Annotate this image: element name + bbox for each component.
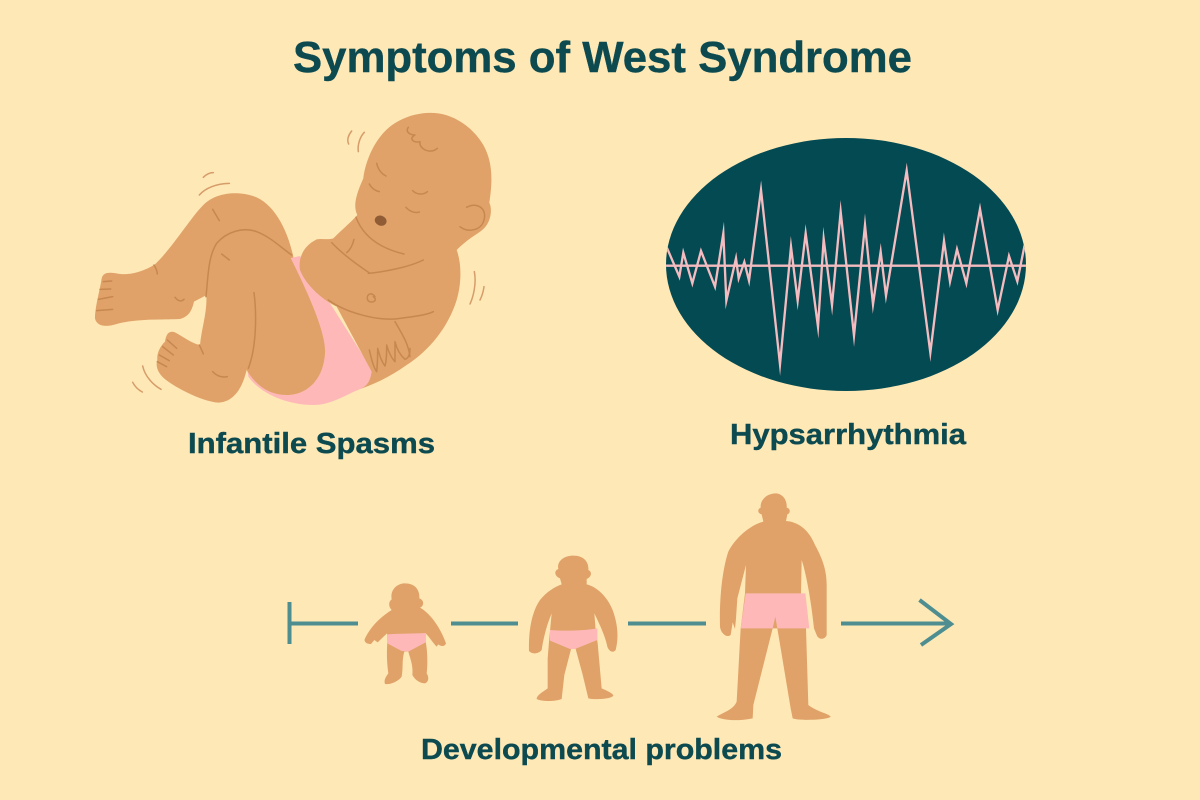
- infographic canvas: [95, 40, 1026, 766]
- spasm motion marks: [133, 131, 484, 392]
- label: developmental problems: Developmental problems: [421, 734, 782, 766]
- figure: toddler: [529, 556, 617, 701]
- arrow head: [920, 600, 951, 645]
- baby mouth: [373, 214, 388, 227]
- label: infantile spasms: Infantile Spasms: [188, 428, 435, 460]
- figure: adult: [717, 493, 831, 720]
- baby back leg: [95, 193, 293, 326]
- baby head and torso: [300, 113, 491, 390]
- development timeline arrow: [289, 600, 951, 645]
- dark oval background: [666, 138, 1026, 391]
- EEG lines: [650, 171, 1050, 364]
- pink diaper: [247, 256, 373, 405]
- baby contour lines: [97, 127, 485, 377]
- chart: hypsarrhythmia EEG trace: [650, 138, 1050, 391]
- figure: infant: [365, 583, 446, 684]
- figures: infant and toddler: [365, 556, 617, 701]
- baby front leg: [157, 232, 325, 403]
- illustration: infant having spasms: [95, 113, 491, 405]
- label: hypsarrhythmia: Hypsarrhythmia: [730, 419, 967, 451]
- title: Symptoms of West Syndrome: [293, 33, 912, 82]
